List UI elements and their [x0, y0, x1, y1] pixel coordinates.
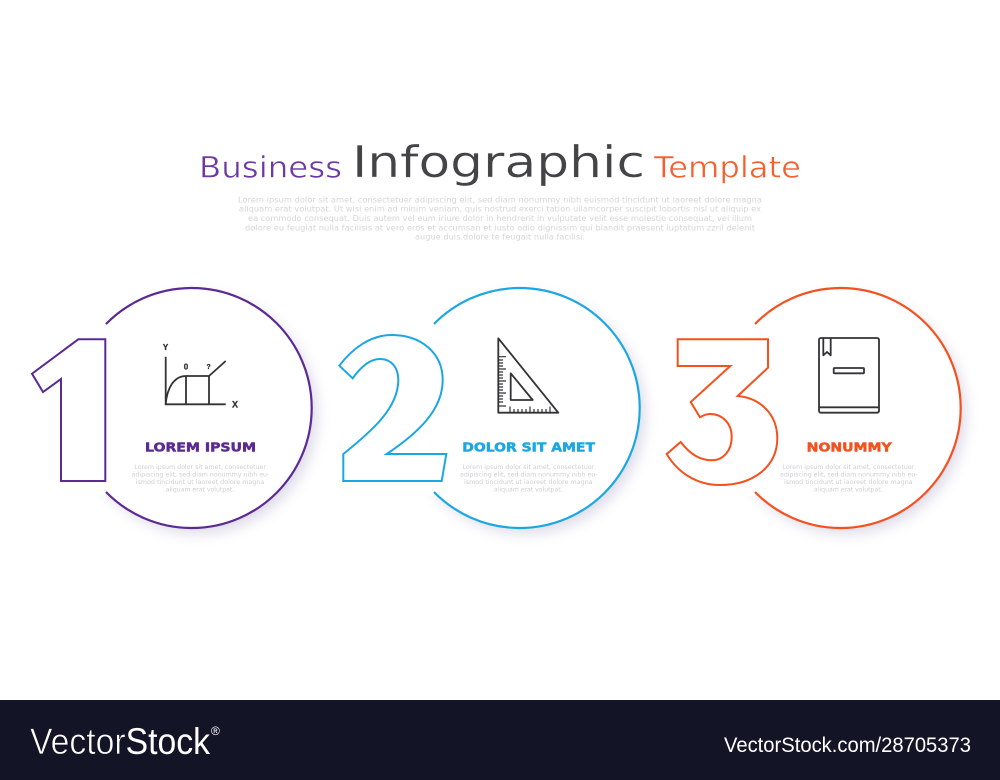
panel: step 1: [20, 288, 316, 533]
title: [199, 137, 801, 188]
icon: graph: [163, 343, 238, 410]
body text 1: [132, 464, 269, 494]
heading 1: LOREM IPSUM: [145, 439, 256, 454]
body text 1: adipiscing elit, sed diam nonummy nibh eu-: [132, 472, 269, 479]
heading 2: DOLOR SIT AMET: [462, 439, 596, 454]
title: Infographic: [352, 137, 645, 188]
icon: graph: X: [232, 400, 238, 410]
title: Business: [199, 151, 342, 185]
intro text block: augue duis dolore te feugait nulla facilisi.: [415, 233, 585, 242]
icon: set square: [498, 338, 558, 413]
panel: step 2: [335, 288, 644, 533]
body text 1: aliquam erat volutpat.: [166, 487, 234, 494]
body text 3: ismod tincidunt ut laoreet dolore magna: [784, 479, 913, 486]
body text 1: Lorem ipsum dolor sit amet, consectetuer: [134, 464, 266, 471]
icon: book: [819, 338, 879, 413]
body text 2: aliquam erat volutpat.: [494, 487, 563, 494]
body text 2: ismod tincidunt ut laoreet dolore magna: [464, 479, 593, 486]
intro text block: aliquam erat volutpat. Ut wisi enim ad minim veniam, quis nostrud exerci tation ullamcorper suscipit lobortis nisl ut aliquip ex: [239, 205, 762, 214]
body text 3: [780, 464, 918, 494]
numeral 3: [667, 339, 777, 485]
body text 3: aliquam erat volutpat.: [814, 487, 883, 494]
registered mark: ®: [211, 724, 220, 738]
footer logo: VectorStock: [30, 721, 210, 762]
icon: graph: 0: [184, 362, 189, 372]
numeral 1: [32, 339, 105, 481]
circle outline 2: [434, 288, 640, 528]
body text 1: ismod tincidunt ut laoreet dolore magna: [136, 479, 265, 486]
intro text block: ea commodo consequat. Duis autem vel eum iriure dolor in hendrerit in vulputate velit esse molestie consequat, vel illum: [248, 214, 752, 223]
body text 3: Lorem ipsum dolor sit amet, consectetuer: [783, 464, 915, 471]
intro text block: Lorem ipsum dolor sit amet, consectetuer adipiscing elit, sed diam nonummy nibh euismod tincidunt ut laoreet dolore magna: [238, 195, 762, 204]
body text 3: adipiscing elit, sed diam nonummy nibh eu-: [780, 472, 918, 479]
numeral 2: [339, 335, 446, 481]
intro text block: [238, 195, 762, 242]
footer bar: [0, 700, 1000, 780]
title: Template: [653, 151, 801, 185]
circle outline 3: [755, 288, 961, 528]
intro text block: dolore eu feugiat nulla facilisis at vero eros et accumsan et iusto odio dignissim qui blandit praesent luptatum zzril delenit: [245, 223, 755, 232]
heading 3: NONUMMY: [807, 439, 893, 454]
body text 2: adipiscing elit, sed diam nonummy nibh eu-: [460, 472, 598, 479]
footer url: VectorStock.com/28705373: [724, 734, 971, 757]
panel: step 3: [660, 288, 965, 533]
body text 2: [460, 464, 598, 494]
icon: graph: ?: [207, 364, 211, 371]
body text 2: Lorem ipsum dolor sit amet, consectetuer: [463, 464, 595, 471]
circle outline 1: [106, 288, 312, 528]
icon: graph: Y: [163, 343, 169, 352]
